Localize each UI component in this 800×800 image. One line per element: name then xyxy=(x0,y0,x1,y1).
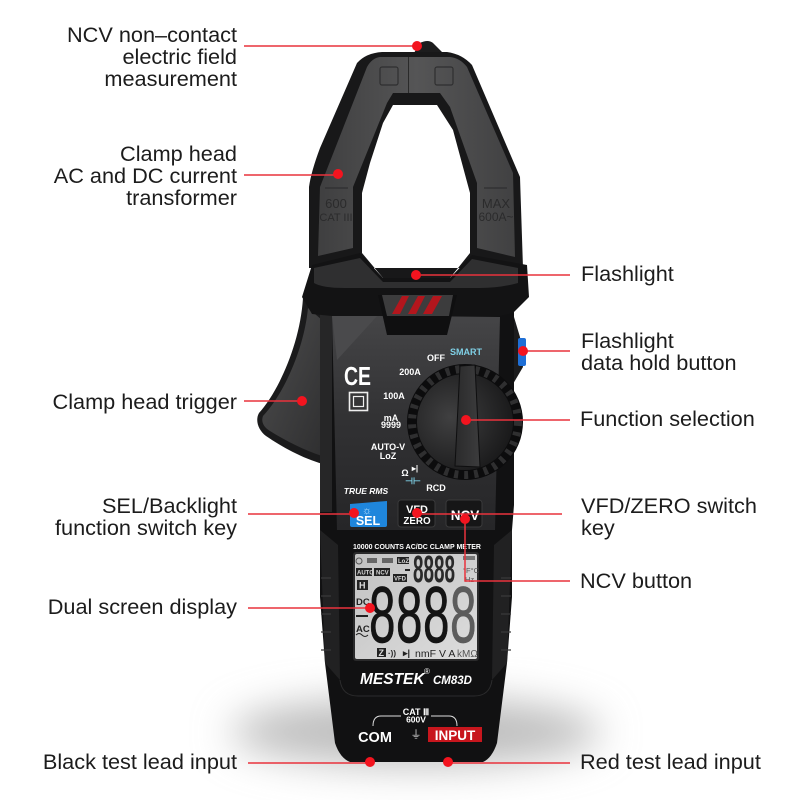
clamp jaw: MAX xyxy=(482,196,510,211)
callout: NCV: measurement xyxy=(104,66,237,91)
input terminals: COM xyxy=(358,730,392,746)
clamp jaw: 600A~ xyxy=(478,210,514,224)
dial scale labels: ⊣⊢ xyxy=(405,476,421,486)
dial scale labels: mA xyxy=(384,413,399,423)
main readout xyxy=(369,570,476,659)
VFD ZERO button: VFD xyxy=(406,504,428,516)
LCD screen xyxy=(353,549,480,661)
callout: VFD ZERO key xyxy=(412,493,757,540)
NCV sensor tip xyxy=(414,41,443,53)
callout: SEL key xyxy=(55,493,359,540)
callout: NCV button xyxy=(460,514,692,593)
left body strip xyxy=(320,312,332,512)
secondary readout: 8888 xyxy=(413,549,455,591)
side grips xyxy=(320,530,340,680)
callout: clamp head: AC and DC current xyxy=(54,163,237,188)
true rms label: TRUE RMS xyxy=(344,486,389,496)
red vents xyxy=(392,296,442,314)
dial scale labels: OFF xyxy=(427,353,445,363)
dial scale labels: 100A xyxy=(383,391,405,401)
CE mark: CE xyxy=(344,361,371,391)
status icons xyxy=(356,556,480,584)
callout: function selection xyxy=(461,406,755,431)
callout: flashlight xyxy=(411,261,674,286)
dial scale labels: RCD xyxy=(426,483,446,493)
callout: flashlight data hold button xyxy=(518,328,737,375)
callout: red lead xyxy=(443,749,761,774)
unit row xyxy=(377,648,478,660)
callout: clamp head: Clamp head xyxy=(120,141,237,166)
callout: flashlight data hold button: data hold button xyxy=(581,350,737,375)
callout: NCV: NCV non–contact xyxy=(67,22,237,47)
input terminals: INPUT xyxy=(435,728,476,743)
SEL button xyxy=(350,501,387,528)
VFD ZERO button xyxy=(398,500,435,527)
main readout: 8 xyxy=(423,570,449,659)
unit row: V A xyxy=(439,648,455,660)
center recess xyxy=(378,295,457,335)
dial scale labels: 200A xyxy=(399,367,421,377)
function selection dial xyxy=(407,364,523,480)
clamp jaw xyxy=(309,52,523,278)
panel heading: 10000 COUNTS AC/DC CLAMP METER xyxy=(353,544,481,551)
dial scale labels: 9999 xyxy=(381,420,401,430)
callout: black lead: Black test lead input xyxy=(43,749,237,774)
clamp meter device xyxy=(257,41,529,762)
lower panel outline xyxy=(340,680,492,696)
callout: NCV xyxy=(67,22,422,91)
callout: NCV button: NCV button xyxy=(580,568,692,593)
callout: SEL key: SEL/Backlight xyxy=(102,493,237,518)
clamp jaw: CAT III xyxy=(319,212,353,224)
callout: clamp head xyxy=(54,141,343,210)
LCD screen: H xyxy=(359,580,366,590)
CE mark xyxy=(344,361,371,410)
NCV button xyxy=(446,500,482,527)
dial scale labels: ▸| xyxy=(411,464,418,473)
dial scale labels: LoZ xyxy=(380,451,397,461)
unit row: ·)) xyxy=(388,649,396,658)
DC AC icons: AC xyxy=(356,624,370,635)
SEL button: ☼ xyxy=(362,505,372,517)
callout: SEL key: function switch key xyxy=(55,515,237,540)
jaw seam xyxy=(408,57,409,93)
callout: VFD ZERO key: VFD/ZERO switch xyxy=(581,493,757,518)
hold icon xyxy=(357,580,368,590)
VFD ZERO button: ZERO xyxy=(403,516,431,527)
callout: flashlight data hold button: Flashlight xyxy=(581,328,674,353)
side button xyxy=(510,317,526,388)
unit row: Z xyxy=(378,648,384,658)
input terminals xyxy=(358,707,482,746)
callout: black lead xyxy=(43,749,375,774)
DC AC icons: DC xyxy=(356,597,370,608)
callout: VFD ZERO key: key xyxy=(581,515,615,540)
callout: clamp head: transformer xyxy=(126,185,237,210)
jaw markings xyxy=(325,67,507,188)
main readout: 8 xyxy=(369,570,395,659)
SEL button: SEL xyxy=(356,514,381,528)
floor shadow xyxy=(231,698,601,766)
unit row: kMΩ xyxy=(457,649,478,660)
callout: red lead: Red test lead input xyxy=(580,749,761,774)
brand xyxy=(360,667,472,688)
callout: trigger: Clamp head trigger xyxy=(53,389,237,414)
face diagonal panel xyxy=(332,315,378,360)
dial scale labels xyxy=(371,347,482,493)
clamp jaw: 600 xyxy=(325,196,347,211)
clamp head trigger xyxy=(257,298,330,464)
unit row: ▸| xyxy=(402,648,410,658)
callout: dual screen xyxy=(48,594,375,619)
status icons: Hz xyxy=(465,575,474,584)
dial scale labels: AUTO-V xyxy=(371,442,405,452)
input terminals: ⏚ xyxy=(410,728,422,741)
callout: function selection: Function selection xyxy=(580,406,755,431)
dial scale labels: Ω xyxy=(401,468,409,478)
NCV button: NCV xyxy=(451,508,479,523)
DC AC icons xyxy=(356,597,370,636)
main readout: 8 xyxy=(396,570,422,659)
main readout: 8 xyxy=(450,570,476,659)
status icons: LoZ xyxy=(398,559,409,565)
dial scale labels: SMART xyxy=(450,347,482,357)
status icons: VFD xyxy=(394,576,407,582)
unit row: nmF xyxy=(415,648,436,660)
status icons: AUTO xyxy=(357,570,374,576)
brand: MESTEK xyxy=(360,671,426,688)
callout: NCV: electric field xyxy=(122,44,237,69)
upper face xyxy=(332,315,500,530)
callout: dual screen: Dual screen display xyxy=(48,594,237,619)
upper collar xyxy=(302,253,529,335)
input terminals: 600V xyxy=(406,714,426,724)
meter body xyxy=(320,305,514,762)
status icons: °F°C xyxy=(463,566,480,575)
brand: ® xyxy=(424,667,430,676)
status icons: NCV xyxy=(376,570,389,576)
input terminals: CAT Ⅲ xyxy=(403,707,429,717)
callout: flashlight: Flashlight xyxy=(581,261,674,286)
brand: CM83D xyxy=(433,675,472,687)
